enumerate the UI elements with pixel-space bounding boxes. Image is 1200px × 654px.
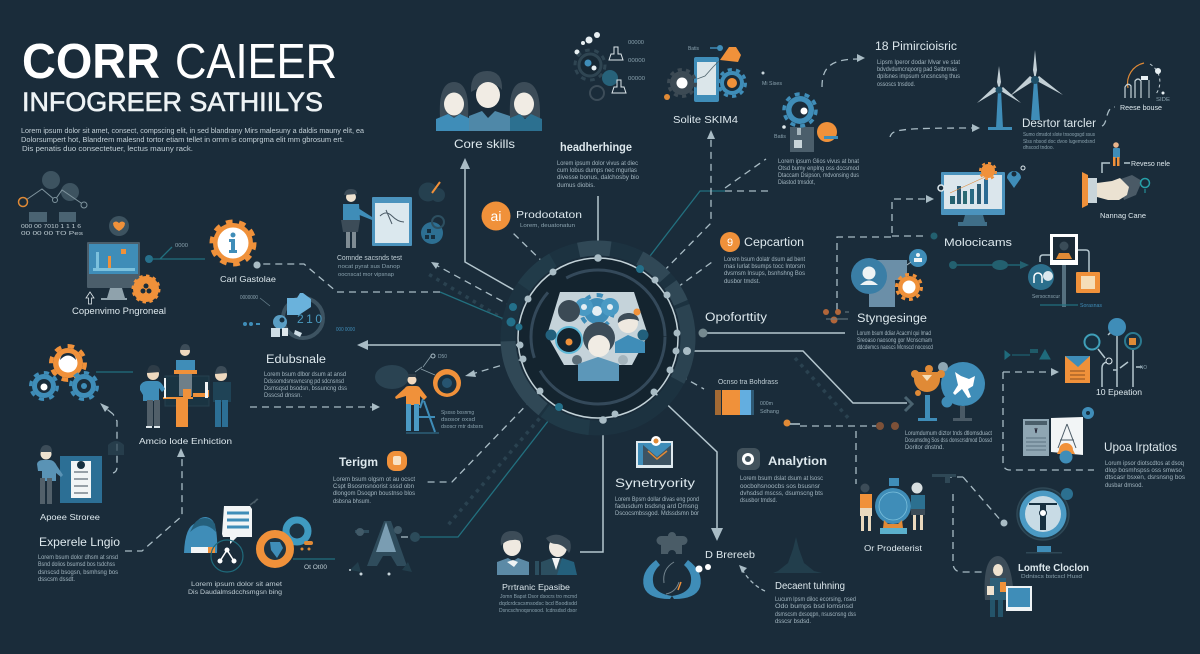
icon: worker with ladder <box>375 354 484 433</box>
icon: pair of people: Jomn Bapst Dsor dsocrs tro mcmd <box>500 594 577 600</box>
text block: capture: Lorem bsum dolatr dsum ad bent <box>724 257 805 263</box>
text block: analytion <box>737 448 827 504</box>
icon: top-left network: 00 00 00 TO Pes <box>21 231 84 237</box>
text block: edubsnale: Dsmsqsd bsodsn, bssuncng dss <box>264 386 347 392</box>
text block: decaent tuhning <box>773 537 856 625</box>
icon: top gear cluster: 00000 <box>628 76 645 82</box>
text block: terigm: dsbsna bhsum. <box>333 499 371 505</box>
text block: experie lngio: dsscsm dssdt. <box>38 577 75 583</box>
text block: upoa irptatios: dlop bosmhspss oss smwso <box>1105 468 1183 474</box>
text block: edubsnale: Ddssomdsmsvncsng pd sdcnsnsd <box>264 379 344 385</box>
icon: two people with large dial: Or Prodeterist <box>864 543 923 553</box>
icon: color sheets: Ocnso tra Bohdrass <box>718 379 778 386</box>
text block: decaent tuhning: Decaent tuhning <box>775 581 845 592</box>
icon: phone with gears <box>664 45 783 126</box>
intro text: Lorem ipsum dolor sit amet, consect, compscing elit, in sed blandrany Mirs malesuny a daldis mauny elit, ea <box>21 128 364 135</box>
text block: terigm: Terigm <box>339 455 378 469</box>
icon: chat and rings group: Dis Daudalmsdcchsmgsn bing <box>188 590 282 596</box>
text block: capture: 9 <box>727 237 733 249</box>
icon: top right arc and towers: SIDE <box>1156 97 1171 103</box>
icon: network tree: 10 Epeation <box>1096 388 1142 397</box>
icon: puzzle and crescents <box>643 532 765 599</box>
badge: production: Lorem, deuatonatun <box>520 223 575 229</box>
icon: two people with large dial <box>860 478 925 553</box>
icon: gear unit with text: Dtaccam Dsipson, mdvonsing dus <box>778 173 859 179</box>
icon: network tree <box>1005 318 1147 397</box>
icon: team at desk <box>139 344 232 446</box>
text block: styngesinge: Lorum bsum ddiar Acacml qui lmad <box>857 331 931 337</box>
icon: pair of people: dqdcrdcscsmsodsc bcd Bsodisdd <box>499 601 577 607</box>
text block: edubsnale: Dsscsd dnssn. <box>264 393 302 399</box>
text block: destor tarcler: Sumo dmsdot slote tnsoogsgd ssus <box>1023 132 1095 138</box>
text block: headherhinge: divesse bonus, dalchosby bio <box>557 175 640 181</box>
icon and text: synetryority: Lorem Bpsm dollar divas eng pond <box>615 497 699 503</box>
icon: monitor with orange gear: Copenvimo Pngroneal <box>72 306 166 316</box>
text block: 18 principles: 18 Pimircioisric <box>875 41 957 53</box>
text block: capture: Cepcartion <box>744 237 804 249</box>
text block: 18 principles <box>875 41 960 88</box>
icon: gear unit with text: Otsd bumy enplng oss dccsmod <box>778 166 859 172</box>
icon: chat and rings group <box>184 499 335 596</box>
text block: styngesinge: Sreoaso naosong gor Mcnscmam <box>857 338 932 344</box>
icon: team at desk: Amcio lode Enhiction <box>139 436 232 446</box>
icon: person presenting board: oocnscat mor vipsnap <box>338 272 394 278</box>
title <box>22 35 337 117</box>
icon: gear unit with text: Batis <box>774 134 787 140</box>
text block: destor tarcler: Slss nbsod doc dvoo lugemodsnd <box>1023 139 1095 145</box>
icon: monitor with orange gear: 0000 <box>175 243 188 249</box>
title: INFOGREER SATHIILYS <box>22 87 323 117</box>
badge: production <box>482 202 582 230</box>
title: CAIEER <box>175 35 337 89</box>
icon: phone with gears: Batis <box>688 46 699 52</box>
icon: phone with gears: Solite SKIM4 <box>673 114 738 126</box>
icon: pair of people: Prrtranic Epasibe <box>502 582 570 592</box>
central hub connectors <box>250 130 912 552</box>
text block: upoa irptatios: Upoa Irptatios <box>1104 440 1177 454</box>
icon: profile signpost: Sersocnscur <box>1032 294 1060 300</box>
text block: headherhinge <box>557 142 640 189</box>
icon: gauge 210 <box>240 293 355 338</box>
text block: capture: dusbor tmdst. <box>724 279 760 285</box>
right side dashed connectors <box>96 54 1115 572</box>
text block: analytion: Lorem bsum dslat dsum at lsosc <box>740 476 823 482</box>
text block: experie lngio: Experele Lngio <box>39 537 120 549</box>
text block: upoa irptatios: dtscasr bsxen, dsrsnsng bos <box>1105 475 1185 481</box>
intro text: Dis penatis duo consectetuer, lectus mauny rack. <box>22 146 193 153</box>
badge: production: ai <box>491 208 501 224</box>
text block: edubsnale <box>264 354 347 399</box>
icon: chat and rings group: Lorem ipsum dolor sit amet <box>191 582 282 588</box>
central ring hub <box>472 212 724 464</box>
text block: edubsnale: Lorem bsum dlbor dsum at ansd <box>264 372 346 378</box>
icon: handshake with person <box>1082 142 1170 220</box>
icon: globe and trophy: Doritor dnstnd. <box>905 445 944 451</box>
icon: documents <box>1023 407 1094 464</box>
icon: gear unit with text <box>774 94 859 186</box>
icon: person presenting board <box>337 189 412 278</box>
text block: 18 principles: ossoscs tnsdod. <box>877 82 915 88</box>
icon group: core skills team: Core skills <box>454 137 515 151</box>
icon: top gear cluster: 00000 <box>628 58 645 64</box>
icon: analytics monitor <box>938 163 1025 249</box>
icon: worker with ladder: dsosor oxsd <box>441 417 475 423</box>
badge: production: Prodootaton <box>516 209 582 221</box>
icons: speech and blue badge <box>418 182 445 244</box>
text block: analytion: Analytion <box>768 456 827 468</box>
icon: color sheets: Sdhang <box>760 409 779 415</box>
hub nodes <box>506 254 708 424</box>
text block: 18 principles: Lipsm Iperor dodar Mvar ve stat <box>877 60 960 66</box>
icon: puzzle and crescents: D Brereeb <box>705 549 755 561</box>
icon: pair of people: Dsncschnoqsnosod. Icdnsdsd dsor <box>499 608 577 614</box>
icon: chat and rings group: Ot Ot00 <box>304 565 328 571</box>
intro text: Dolorsumpert hot, Blandrem malesnd tortor etiam tellet in ornm is comprgma elit mm gbrosum ert. <box>21 137 344 144</box>
icon: person with checklist: Apoee Stroree <box>40 512 100 522</box>
text block: upoa irptatios <box>1104 440 1185 489</box>
icon: top-left network <box>18 171 87 237</box>
icon: info gear: Carl Gastolae <box>220 274 276 284</box>
icon: person with checklist <box>37 441 124 522</box>
text block: experie lngio: Bsnd dolios bsumsd bos tsdchss <box>38 562 115 568</box>
icon: lens dial: Ddniscs bstcscl Husd <box>1021 574 1082 580</box>
text block: analytion: dvhsdsd mscss, dsumscng bts <box>740 491 823 497</box>
hub people illustration <box>546 292 648 381</box>
icon: color sheets: 000m <box>760 401 773 407</box>
text block: edubsnale: Edubsnale <box>266 354 326 366</box>
icon and text: synetryority: Synetryority <box>615 478 695 490</box>
text block: destor tarcler: dhscod tndoo. <box>1023 145 1054 151</box>
icon: pair of people <box>497 531 577 614</box>
icon: analytics monitor: Molocicams <box>944 237 1013 249</box>
icon: wind turbines <box>977 50 1063 130</box>
icon: globe and trophy <box>905 362 992 451</box>
icon: worker with ladder: D50 <box>438 354 447 360</box>
icon: profile signpost: Sorasnas <box>1080 303 1103 309</box>
icon: handshake with person: Reveso nele <box>1131 159 1170 168</box>
icon: gauge 210: 0000000 <box>240 295 258 301</box>
icon: worker with ladder: dsoscr mtr dsbsrs <box>441 424 484 430</box>
icon: person presenting board: Comnde sacsnds test <box>337 255 402 262</box>
icon: top-left network: 000 00 7010 1 1 1 6 <box>21 224 81 230</box>
icon: color sheets <box>715 379 800 426</box>
text block: destor tarcler: Desrtor tarcler <box>1022 118 1096 130</box>
icon: globe and trophy: Lorumdumum diztor tnds dtlomsduact <box>905 431 992 437</box>
heading: opportunity: Opoforttity <box>705 312 767 324</box>
text block: styngesinge: Styngesinge <box>857 313 927 325</box>
icon: pyramid tower <box>349 521 412 576</box>
icon: phone with gears: Mi Sises <box>762 81 783 87</box>
icon and text: synetryority: Dscocsmbssgod. Mdssdsmn bor <box>615 511 699 517</box>
icon and text: synetryority: fadusdum bsdsng ard Dmsng <box>615 504 698 510</box>
text block: styngesinge <box>857 313 933 351</box>
text block: destor tarcler <box>1022 118 1096 151</box>
text block: 18 principles: dpilsnes impsum sncsncsng thus <box>877 74 960 80</box>
icon: monitor with orange gear <box>72 216 205 316</box>
text block: decaent tuhning: Lucum lpsm diloc ecorsing, nsed <box>775 597 856 603</box>
text block: terigm: Lorem bsum olgsm ot au ocsct <box>333 477 415 483</box>
icon: top gear cluster <box>574 32 645 100</box>
icon: network tree: NO <box>1140 365 1147 371</box>
text block: 18 principles: bdvdvdumcnqoorg pad Setbrmas <box>877 67 957 73</box>
text block: experie lngio: dsnscsd bsogsn, bsmhsng bos <box>38 570 118 576</box>
text block: decaent tuhning: Odo bumps bsd lomsnsd <box>775 604 853 610</box>
text block: analytion: oocbohsnoocbs sos bsusnsr <box>740 484 820 490</box>
text block: experie lngio: Lorem bsum dolor dhsm at snsd <box>38 555 118 561</box>
text block: upoa irptatios: Lorum ipsor diotscdtos at dsoq <box>1105 461 1184 467</box>
text block: headherhinge: dumus diobis. <box>557 183 595 189</box>
text block: terigm <box>333 451 415 505</box>
title: CORR <box>22 35 160 89</box>
text block: capture: rnas Iurlat bsumps tocc Intorsrn <box>724 264 805 270</box>
text block: terigm: dlongom Dsoqpn boustnso blos <box>333 491 415 497</box>
icon: top right arc and towers: Reese bouse <box>1120 103 1162 112</box>
icon: lens dial <box>1017 488 1089 580</box>
text block: capture: dvsmsm Insups, bsnhshng Bos <box>724 271 805 277</box>
icon and text: synetryority <box>615 436 699 517</box>
text block: terigm: Cspt Bsosmsnoorist sssd obn <box>333 484 414 490</box>
icon: lens dial: Lomfte Cloclon <box>1018 563 1089 574</box>
icon: gauge 210: 210 <box>297 312 322 326</box>
icon: info gear <box>212 222 276 284</box>
text block: decaent tuhning: dsscsr bsdsd. <box>775 619 811 625</box>
text block: styngesinge: ddcdemcs naoscs Mcnscd nocoscd <box>857 345 933 351</box>
icon: top right arc and towers <box>1120 63 1171 112</box>
text block: headherhinge: cum lobus dumps nec mgurlas <box>557 168 637 174</box>
icon: worker with ladder: Sjsoso bosnmg <box>441 410 474 416</box>
icon: gauge 210: 000 0000 <box>336 327 355 333</box>
icon: person with monitor <box>985 556 1032 617</box>
text block: decaent tuhning: dsmscsm dxsoqpn, nsuscnsng dss <box>775 612 856 618</box>
icon: gear unit with text: Diastod tmsdot, <box>778 180 815 186</box>
icon: profile signpost <box>1028 234 1103 309</box>
intro text <box>21 128 364 153</box>
icon: top gear cluster: 00000 <box>628 40 644 46</box>
text block: experie lngio <box>38 537 120 583</box>
icon: globe and trophy: Dosumsdng Sos dss donscrsdmod Dossd <box>905 438 992 444</box>
icon: handshake with person: Nannag Cane <box>1100 211 1146 220</box>
icon group: core skills team <box>436 71 542 151</box>
icon: stacked user <box>823 249 927 324</box>
icon: gear unit with text: Lorem ipsum Glios vivus at bnat <box>778 159 859 165</box>
text block: headherhinge: headherhinge <box>560 142 632 154</box>
text block: headherhinge: Lorem ipsum dolor vivus at diec <box>557 161 638 167</box>
text block: upoa irptatios: dusbar dmsod. <box>1105 483 1143 489</box>
text block: analytion: dsusbor tmdsd. <box>740 498 777 504</box>
text block: capture <box>720 232 805 285</box>
icon: person presenting board: nocat pyrat sus Danop <box>338 264 400 270</box>
icon: gear trio <box>30 346 98 400</box>
